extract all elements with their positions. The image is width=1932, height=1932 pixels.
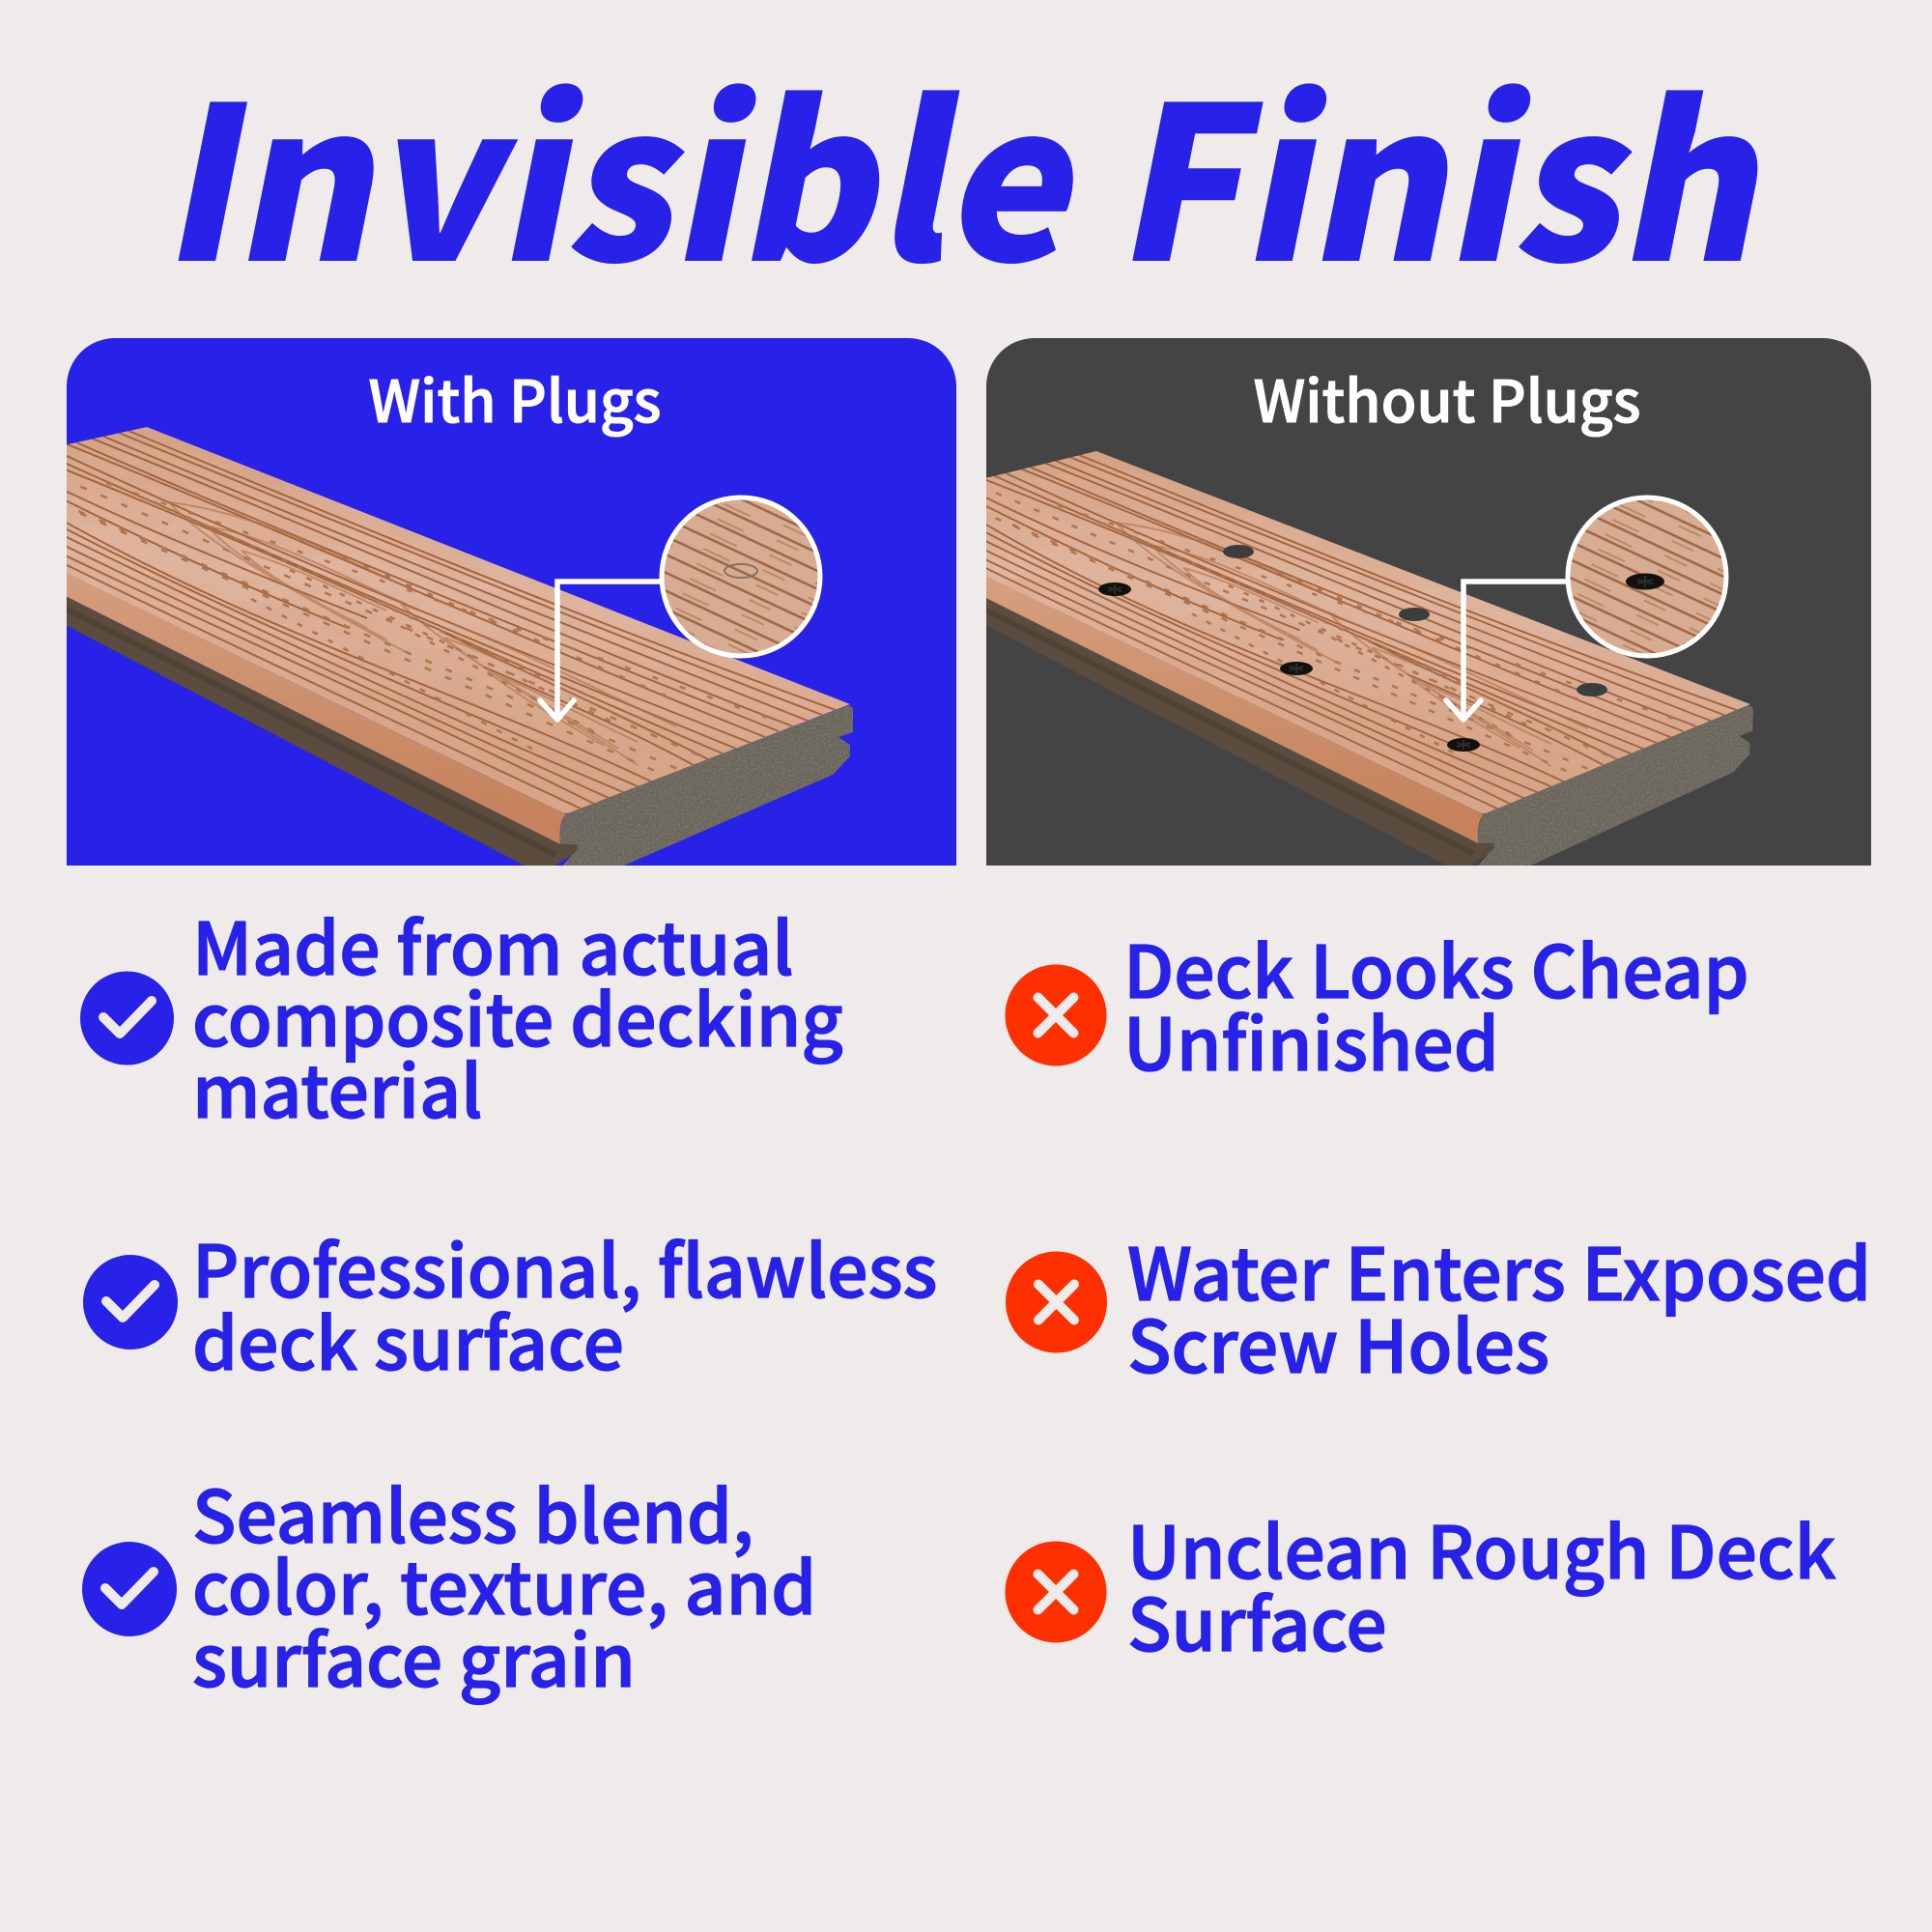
text: seamless blend: Seamless blend, bbox=[192, 1459, 753, 1564]
screw bbox=[1280, 662, 1313, 675]
panel heading: with plugs: With Plugs bbox=[369, 355, 661, 440]
text: water enters: Water Enters Exposed bbox=[1127, 1216, 1871, 1321]
panel: without plugs bbox=[972, 338, 1871, 881]
hole bbox=[1223, 545, 1254, 558]
text: made from composite: Made from actual bbox=[192, 891, 794, 996]
drawback 2 bbox=[1006, 1216, 1871, 1394]
benefit 3 bbox=[82, 1459, 816, 1708]
text: unclean rough: Surface bbox=[1127, 1567, 1387, 1672]
icon: check bbox=[80, 972, 174, 1065]
text: seamless blend bbox=[192, 1459, 816, 1708]
panel: with plugs bbox=[19, 338, 956, 874]
text: seamless blend: surface grain bbox=[192, 1603, 636, 1708]
text: made from composite bbox=[192, 891, 843, 1139]
screw bbox=[1098, 582, 1131, 596]
arrow: lens to board bbox=[1446, 582, 1573, 720]
icon: cross bbox=[1005, 964, 1107, 1066]
benefit 1 bbox=[80, 891, 843, 1139]
icon: check bbox=[83, 1255, 178, 1350]
drawback 1 bbox=[1005, 914, 1749, 1092]
arrow: lens to board bbox=[540, 582, 667, 720]
text: deck looks cheap: Unfinished bbox=[1123, 986, 1499, 1092]
panel heading: without plugs: Without Plugs bbox=[1254, 355, 1640, 440]
hole bbox=[1399, 608, 1430, 621]
hole bbox=[1577, 683, 1607, 696]
text: unclean rough: Unclean Rough Deck bbox=[1127, 1494, 1836, 1600]
text: unclean rough bbox=[1127, 1494, 1836, 1672]
text: deck looks cheap: Deck Looks Cheap bbox=[1123, 914, 1749, 1019]
text: made from composite: composite decking bbox=[192, 962, 843, 1067]
magnifier lens: exposed screw bbox=[1568, 497, 1726, 656]
screw bbox=[1447, 738, 1480, 752]
text: seamless blend: color, texture, and bbox=[192, 1530, 816, 1635]
text: water enters: Screw Holes bbox=[1127, 1289, 1549, 1394]
text: made from composite: material bbox=[192, 1034, 482, 1139]
text: water enters bbox=[1127, 1216, 1871, 1394]
title: Invisible Finish bbox=[148, 14, 1804, 323]
icon: cross bbox=[1005, 1542, 1107, 1642]
drawback 3 bbox=[1005, 1494, 1836, 1672]
magnifier lens: hidden plug bbox=[662, 497, 820, 656]
image: decking board without visible holes bbox=[67, 427, 853, 866]
text: deck looks cheap bbox=[1123, 914, 1749, 1092]
text: professional surface: deck surface bbox=[192, 1286, 624, 1391]
icon: check bbox=[82, 1542, 177, 1636]
icon: cross bbox=[1006, 1252, 1107, 1352]
image: decking board with holes bbox=[986, 451, 1753, 866]
benefit 2 bbox=[83, 1213, 937, 1391]
text: professional surface bbox=[192, 1213, 937, 1391]
text: professional surface: Professional, flawless bbox=[192, 1213, 937, 1319]
